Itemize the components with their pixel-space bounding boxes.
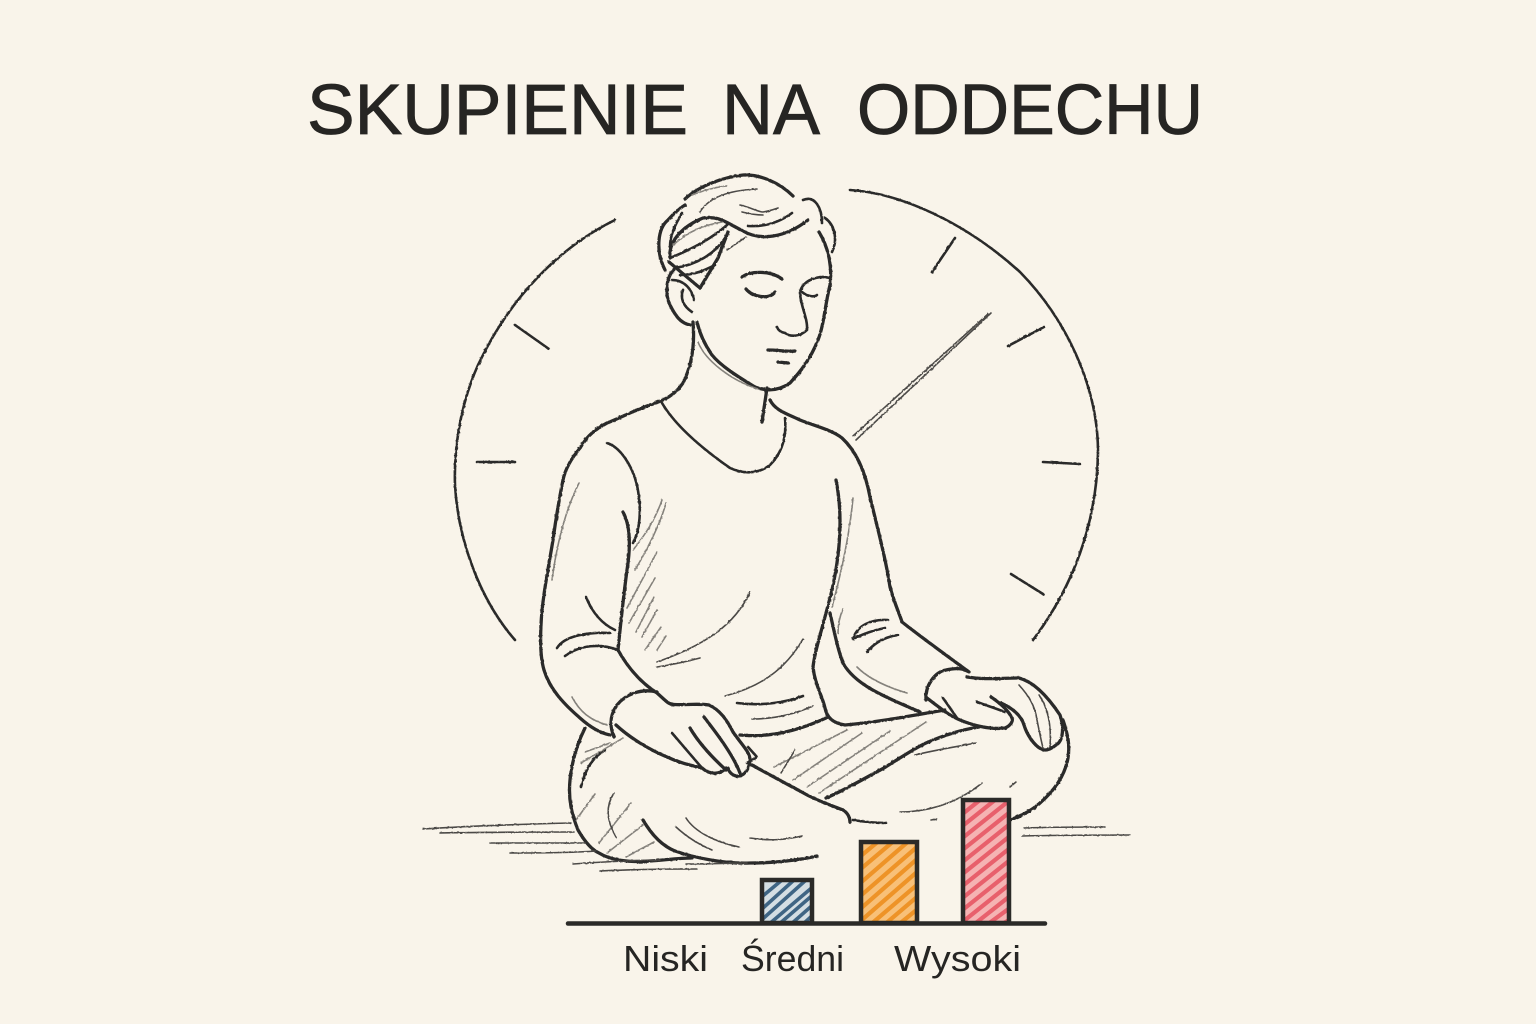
face: [667, 232, 831, 390]
title: NA: [722, 71, 821, 150]
bar: wysoki (red): [960, 798, 1012, 922]
title: [307, 71, 1203, 150]
clock dial behind the figure: [455, 190, 1098, 640]
right hand: [926, 669, 1063, 750]
floor shadow lines: [423, 823, 1130, 871]
chart baseline: [568, 921, 1045, 926]
clock hand: [853, 313, 991, 440]
title: SKUPIENIE: [307, 71, 688, 150]
hair: [659, 175, 835, 288]
label: Niski: Niski: [623, 938, 708, 979]
bar: sredni (orange): [858, 840, 920, 922]
bar chart: [568, 796, 1045, 979]
left sleeve: [541, 443, 672, 735]
label: Sredni: Średni: [741, 937, 844, 979]
torso hatching and folds: [627, 480, 945, 736]
bar: niski (blue): [760, 878, 814, 922]
label: Wysoki: Wysoki: [894, 938, 1021, 979]
neck and shoulders: [580, 322, 902, 622]
crossed legs: [569, 720, 1069, 863]
title: ODDECHU: [857, 71, 1203, 150]
left hand: [611, 691, 757, 776]
right sleeve: [830, 609, 969, 712]
meditating figure: [423, 175, 1130, 871]
